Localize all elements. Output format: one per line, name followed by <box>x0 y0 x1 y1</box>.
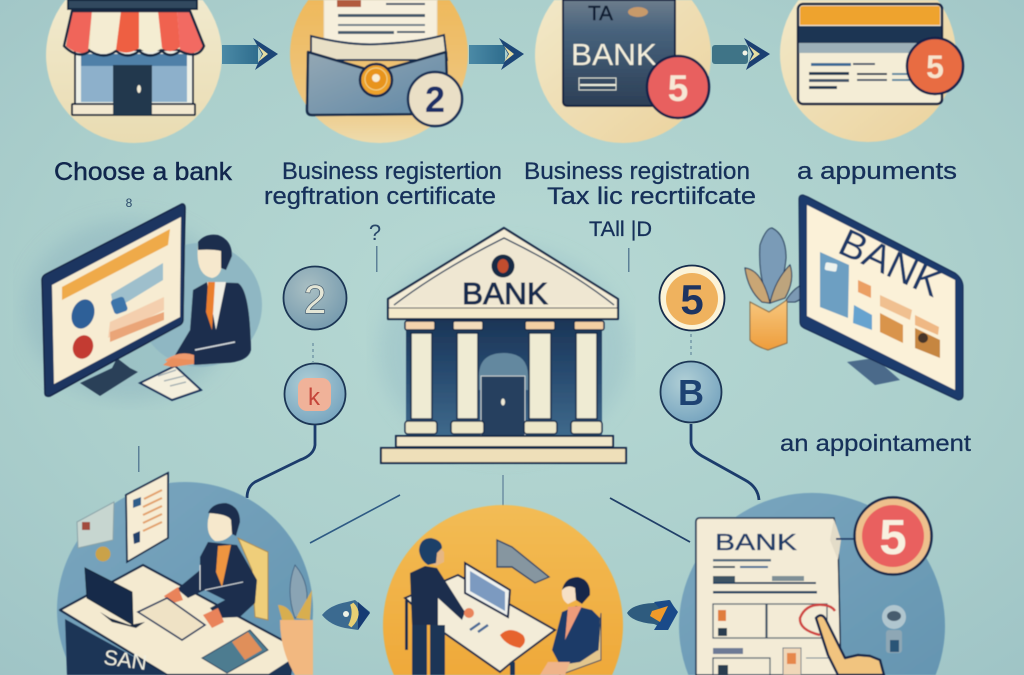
panel: bottom center meeting <box>383 505 623 675</box>
small marks above panels: 8 <box>126 196 133 210</box>
icon: storefront <box>64 0 204 115</box>
badge: number 2: 2 <box>425 79 445 120</box>
connector: bottom-left diagonal <box>310 495 400 543</box>
connector: left badge to bottom-left panel <box>247 425 315 498</box>
badge: letter b: B <box>678 372 704 413</box>
icon: desk and computer <box>405 563 555 675</box>
badge: orange number 5: 5 <box>680 276 704 323</box>
panel: bottom-right bank form <box>679 493 945 675</box>
small marks above panels <box>126 196 630 472</box>
panel: online bank research <box>25 204 262 400</box>
icon: desk <box>60 565 295 675</box>
badge: number 5 orange <box>907 38 963 94</box>
badge: number 5 <box>647 56 709 118</box>
connector: bottom-right diagonal <box>610 498 690 542</box>
icon: orange circle <box>290 0 468 143</box>
icon: red circled mark <box>800 605 835 635</box>
text block: business registration certificate: Business registertion <box>282 158 502 185</box>
badge: number 5 orange: 5 <box>926 49 944 85</box>
connector: badge 2 to badge b <box>312 343 314 362</box>
icon: dark bank document: BANK <box>571 37 657 72</box>
connector: form to badge <box>836 538 856 540</box>
badge: number 5: 5 <box>668 68 688 109</box>
text block: tax certificate <box>524 158 756 241</box>
badge: grey number 2 <box>284 266 346 330</box>
badge: document icon: k <box>308 384 321 411</box>
icon: blue circle <box>57 482 313 675</box>
badge: number 2 <box>408 72 462 126</box>
icon: desk items: SAN <box>102 646 148 675</box>
icon: person in suit <box>165 235 251 367</box>
icon: credit card <box>798 4 942 104</box>
icon: blue circle behind person <box>138 243 262 367</box>
icon: steps <box>381 436 626 463</box>
text block: tax certificate: Business registration <box>524 158 750 185</box>
icon: pediment <box>388 228 618 319</box>
panel: step 4 bank card <box>780 0 963 142</box>
connector: center vertical <box>502 475 504 506</box>
panel: central bank building <box>379 228 629 463</box>
icon: pointing hand <box>816 615 884 675</box>
icon: dark bank document <box>563 0 675 106</box>
arrow: step 2 to 3 <box>469 38 524 70</box>
icon: right monitor: BANK <box>832 221 948 306</box>
icon: dark bank document: TA <box>588 3 614 25</box>
heading: an appointment: an appointament <box>780 430 972 456</box>
badge: letter b <box>660 362 722 422</box>
heading: appointments: a appuments <box>797 158 957 185</box>
icon: document <box>324 0 437 48</box>
shadow <box>379 245 629 455</box>
badge: big number 5: 5 <box>879 511 907 565</box>
icon: seated woman <box>540 577 601 675</box>
shadow blob <box>25 220 235 400</box>
icon: banker <box>164 503 257 628</box>
panel: bank website monitor <box>745 195 963 400</box>
icon: orange seal <box>360 64 392 96</box>
icon: wall screen <box>497 540 549 583</box>
badge: orange number 5 <box>660 266 724 330</box>
icon: grey emblem <box>882 605 906 653</box>
icon: hand and clipboard <box>140 358 201 400</box>
text block: tax certificate: TAll |D <box>589 218 652 241</box>
icon: cream circle <box>535 0 711 143</box>
icon: plant <box>278 565 313 675</box>
arrow: bottom left to center <box>322 600 370 630</box>
icon: dark interior <box>406 318 602 436</box>
text block: business registration certificate: regftration certificate <box>264 183 496 210</box>
heading: choose a bank: Choose a bank <box>54 158 233 186</box>
icon: wall documents <box>77 473 168 562</box>
icon: right monitor <box>799 195 963 400</box>
icon: door <box>479 353 528 436</box>
icon: left monitor <box>42 204 185 396</box>
icon: form document: BANK <box>715 529 798 555</box>
panel: bottom-left banker at desk <box>57 473 313 675</box>
icon: chair <box>238 538 268 620</box>
arrow: bottom center to right <box>627 600 678 630</box>
badge: document icon <box>284 364 346 424</box>
icon: desk items <box>85 568 268 675</box>
icon: folder <box>307 35 448 115</box>
text block: business registration certificate <box>264 158 502 210</box>
icon: cream circle <box>780 0 956 142</box>
icon: form document <box>696 518 841 675</box>
panel: step 3 tax bank card <box>535 0 711 143</box>
connector: right badge to bottom-right panel <box>691 424 759 500</box>
icon: pediment: BANK <box>462 276 548 311</box>
panel: step 2 documents folder <box>290 0 468 143</box>
connector: badge 5 to badge b <box>690 334 692 358</box>
icon: blue circle <box>679 493 945 675</box>
icon: columns <box>405 321 604 434</box>
badge: big number 5 <box>854 498 932 574</box>
arrow: step 1 to 2 <box>222 38 278 70</box>
badge: grey number 2: 2 <box>304 278 326 322</box>
icon: monitor stand <box>847 358 900 385</box>
icon: orange circle <box>383 505 623 675</box>
icon: standing man <box>410 538 474 675</box>
arrow: step 3 to 4 <box>712 38 770 70</box>
icon: plant pot <box>745 228 808 350</box>
panel: step 1 choose a bank storefront <box>46 0 222 143</box>
text block: tax certificate: Tax lic recrtiifcate <box>547 183 756 210</box>
icon: cream circle <box>46 0 222 143</box>
small marks above panels: ? <box>369 220 381 245</box>
